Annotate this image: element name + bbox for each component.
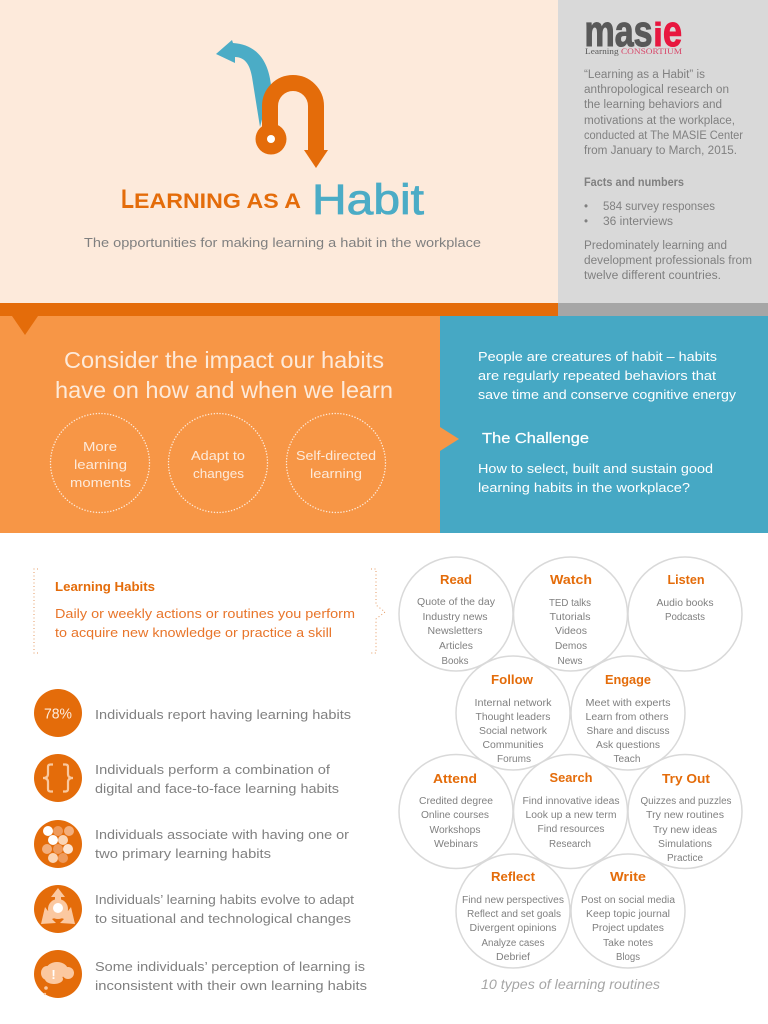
circle: read: Industry news <box>422 612 488 623</box>
text: challenge question: How to select, built and sustain good <box>478 461 713 476</box>
text: facts and numbers: 584 survey responses <box>603 201 715 213</box>
text: research description <box>584 69 743 157</box>
circle: search: Research <box>549 839 591 850</box>
logo: masie: i <box>654 16 662 53</box>
circle: read <box>399 557 513 671</box>
stat: primary habits <box>34 820 350 868</box>
pointer: header notch <box>12 316 38 335</box>
stat: primary habits: Individuals associate with having one or <box>95 827 350 842</box>
heading: learning as a habit: Habit <box>312 176 424 224</box>
subtitle: The opportunities for making learning a habit in the workplace <box>84 235 481 250</box>
circle: write: Post on social media <box>581 895 675 906</box>
circle: adapt to changes: changes <box>193 466 245 481</box>
circle: engage: Teach <box>614 754 640 765</box>
stat: inconsistent perception: Some individuals’ perception of learning is <box>95 959 366 974</box>
panel: about the research <box>558 0 768 303</box>
text: participants <box>584 240 752 282</box>
circle: reflect <box>456 854 570 968</box>
text: research description: anthropological research on <box>584 84 729 96</box>
stat: 78 percent <box>34 689 352 737</box>
text: challenge question: learning habits in the workplace? <box>478 480 690 495</box>
circle: engage <box>571 656 685 770</box>
circle: read: Newsletters <box>428 626 482 637</box>
circle: reflect: Divergent opinions <box>470 923 556 934</box>
text: participants: development professionals from <box>584 255 752 267</box>
circle: write: Blogs <box>616 952 640 963</box>
icon: thought cloud: ! <box>51 967 56 982</box>
stat: primary habits: two primary learning habits <box>95 846 272 861</box>
callout: learning habits definition: Learning Habits <box>55 580 155 594</box>
circle: write: Take notes <box>603 938 653 949</box>
stat: 78 percent: Individuals report having learning habits <box>95 707 352 722</box>
circle: self-directed learning: Self-directed <box>296 448 376 463</box>
circle: self-directed learning: learning <box>310 466 362 481</box>
text: participants: twelve different countries. <box>584 270 721 282</box>
heading: learning as a habit: L <box>121 184 134 214</box>
circle: follow: Social network <box>479 726 548 737</box>
stat: combination of habits: digital and face-to-face learning habits <box>95 781 340 796</box>
text: research description: motivations at the workplace, <box>584 115 735 127</box>
text: facts and numbers <box>584 177 715 228</box>
circle: try out: Simulations <box>658 839 712 850</box>
heading: consider the impact: have on how and when we learn <box>55 377 393 403</box>
text: facts and numbers: • <box>584 201 588 213</box>
text: research description: “Learning as a Habit” is <box>584 69 705 81</box>
circle: try out: Quizzes and puzzles <box>640 796 732 807</box>
circle: write: Write <box>610 869 646 884</box>
circle: attend: Attend <box>433 771 477 786</box>
circle: watch: News <box>558 656 582 667</box>
circle: attend: Workshops <box>430 825 480 836</box>
circle: attend <box>399 754 513 868</box>
text: research description: the learning behaviors and <box>584 99 722 111</box>
circle: try out: Practice <box>667 853 703 864</box>
text: creatures of habit: People are creatures of habit – habits <box>478 349 718 364</box>
circle: reflect: Reflect and set goals <box>467 909 561 920</box>
text: creatures of habit: are regularly repeated behaviors that <box>478 368 716 383</box>
heading: the challenge: The Challenge <box>482 431 589 447</box>
text: creatures of habit <box>478 349 737 402</box>
circle: listen <box>628 557 742 671</box>
circle: watch: Tutorials <box>550 612 590 623</box>
circle: follow <box>456 656 570 770</box>
circle: try out: Try new ideas <box>653 825 717 836</box>
stat: inconsistent perception <box>34 950 368 998</box>
logo: masie: Learning CONSORTIUM <box>585 47 682 56</box>
logo: masie: mas <box>584 7 652 56</box>
circle: search: Look up a new term <box>526 810 616 821</box>
stat: evolving habits: Individuals’ learning habits evolve to adapt <box>95 892 354 907</box>
callout: learning habits definition: Daily or weekly actions or routines you perform <box>55 606 355 621</box>
stat: 78 percent: 78% <box>44 706 72 722</box>
circle: search: Find innovative ideas <box>522 796 620 807</box>
circle: write: Keep topic journal <box>586 909 670 920</box>
heading: consider the impact <box>55 347 393 403</box>
text: research description: from January to March, 2015. <box>584 145 737 157</box>
circle: engage: Share and discuss <box>586 726 670 737</box>
circle: attend: Online courses <box>421 810 489 821</box>
stat: evolving habits <box>34 885 354 933</box>
circle: more learning moments: learning <box>74 457 127 472</box>
callout: learning habits definition: to acquire new knowledge or practice a skill <box>55 625 332 640</box>
stat: evolving habits: to situational and technological changes <box>95 911 352 926</box>
icon: three way arrows <box>34 885 82 933</box>
circle: more learning moments <box>50 414 150 512</box>
stat: combination of habits <box>34 754 340 802</box>
circle: listen: Audio books <box>656 598 714 609</box>
circle: watch: TED talks <box>549 598 591 609</box>
circle: follow: Follow <box>491 672 534 687</box>
circle: attend: Credited degree <box>419 796 493 807</box>
icon: thought cloud <box>34 950 82 998</box>
circle: write: Project updates <box>592 923 664 934</box>
circle: engage: Meet with experts <box>586 698 670 709</box>
circle: try out: Try new routines <box>646 810 724 821</box>
stat: combination of habits: Individuals perform a combination of <box>95 762 330 777</box>
circle: engage: Learn from others <box>586 712 668 723</box>
circle: self-directed learning <box>286 414 386 512</box>
circle: try out: Try Out <box>662 771 711 786</box>
circle: watch <box>514 557 628 671</box>
circle: search <box>514 754 628 868</box>
circle: more learning moments: More <box>83 439 117 454</box>
circle: read: Quote of the day <box>417 597 495 608</box>
circle: reflect: Analyze cases <box>482 938 544 949</box>
circle: engage: Ask questions <box>596 740 660 751</box>
text: participants: Predominately learning and <box>584 240 727 252</box>
panel: the challenge <box>440 316 768 533</box>
circle: follow: Internal network <box>474 698 553 709</box>
circle: read: Read <box>440 572 472 587</box>
circle: adapt to changes: Adapt to <box>191 448 245 463</box>
circle: write <box>571 854 685 968</box>
heading: learning as a habit: EARNING AS A <box>134 190 301 213</box>
caption: 10 types of learning routines: 10 types of learning routines <box>481 977 660 992</box>
icon: curly braces <box>34 754 82 802</box>
text: challenge question <box>478 461 713 495</box>
circle: reflect: Debrief <box>496 952 530 963</box>
pointer: orange arrow <box>440 427 459 451</box>
circle: listen: Podcasts <box>665 612 705 623</box>
circle: watch: Watch <box>550 572 592 587</box>
panel: title header <box>0 0 558 303</box>
circle: adapt to changes <box>168 414 268 512</box>
circle: listen: Listen <box>668 572 705 587</box>
circle: watch: Demos <box>555 641 587 652</box>
icon: habit loop arrows <box>216 40 328 168</box>
text: creatures of habit: save time and conserve cognitive energy <box>478 387 737 402</box>
circle: follow: Forums <box>497 754 531 765</box>
circle: reflect: Reflect <box>491 869 536 884</box>
text: facts and numbers: 36 interviews <box>603 216 673 228</box>
circle: reflect: Find new perspectives <box>462 895 564 906</box>
text: facts and numbers: Facts and numbers <box>584 177 684 189</box>
stat: inconsistent perception: inconsistent with their own learning habits <box>95 978 368 993</box>
circle: attend: Webinars <box>434 839 478 850</box>
circle: follow: Communities <box>482 740 544 751</box>
circle: watch: Videos <box>555 626 587 637</box>
circle: search: Find resources <box>538 824 604 835</box>
circle: more learning moments: moments <box>70 475 132 490</box>
circle: search: Search <box>550 770 593 785</box>
circle: try out <box>628 754 742 868</box>
circle: follow: Thought leaders <box>476 712 550 723</box>
text: facts and numbers: • <box>584 216 588 228</box>
circle: engage: Engage <box>605 672 651 687</box>
circle: read: Books <box>442 656 468 667</box>
panel: habit impact <box>0 316 440 533</box>
logo: masie: e <box>663 7 682 56</box>
callout: learning habits definition <box>34 569 385 653</box>
heading: learning as a habit <box>121 176 424 224</box>
icon: honeycomb dots <box>34 820 82 868</box>
heading: consider the impact: Consider the impact our habits <box>64 347 384 373</box>
circle: read: Articles <box>439 641 473 652</box>
text: research description: conducted at The MASIE Center <box>584 130 743 142</box>
